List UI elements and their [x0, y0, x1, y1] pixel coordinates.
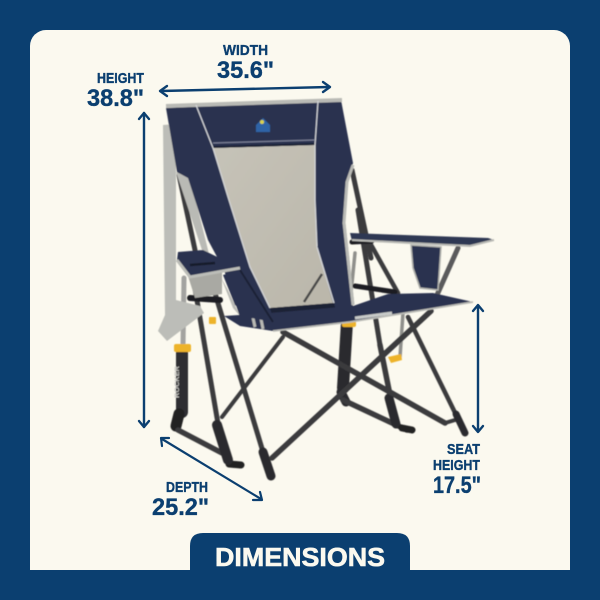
yellow collars and levers: [174, 317, 402, 363]
rocker label: ROCKER: [175, 365, 181, 398]
right armrest: [350, 233, 494, 245]
right arm pocket: [411, 245, 441, 290]
back right band over seat: [317, 223, 353, 304]
label: width: WIDTH: [223, 42, 268, 59]
arrow: height: [139, 113, 149, 427]
left arm cup holder: [188, 272, 222, 298]
left front post: [223, 270, 273, 322]
gray edge binding: [166, 100, 353, 305]
chair back fabric: [166, 100, 353, 318]
chair photo: [158, 100, 494, 476]
chair frame tubes: [176, 170, 465, 476]
label: seat height: SEAT: [447, 441, 480, 458]
seat: [224, 293, 473, 331]
mesh lower opening: [270, 303, 336, 315]
title tab: [190, 533, 410, 572]
label: width: [217, 42, 274, 84]
gray strap: [158, 124, 204, 341]
logo: [256, 118, 270, 132]
mesh top band line: [213, 144, 315, 147]
seat edge: [273, 302, 473, 331]
left armrest: [177, 250, 240, 277]
label: depth: [152, 479, 209, 521]
label: height: HEIGHT: [97, 70, 144, 87]
label: seat height: 17.5": [433, 472, 481, 499]
label: seat height: [433, 441, 481, 499]
label: width: 35.6": [217, 57, 274, 84]
arrow: width: [160, 82, 330, 96]
arrow: depth: [161, 438, 262, 500]
left side binding: [176, 172, 240, 316]
mesh panel: [213, 145, 333, 308]
white piping: [196, 101, 334, 308]
label: depth: 25.2": [152, 494, 209, 521]
arrow: seat height: [473, 305, 483, 432]
label: height: [87, 70, 144, 112]
label: seat height: HEIGHT: [433, 457, 480, 474]
title tab: DIMENSIONS: [215, 542, 385, 572]
label: depth: DEPTH: [166, 479, 208, 496]
label: height: 38.8": [87, 85, 144, 112]
brace behind mesh: [304, 274, 322, 302]
